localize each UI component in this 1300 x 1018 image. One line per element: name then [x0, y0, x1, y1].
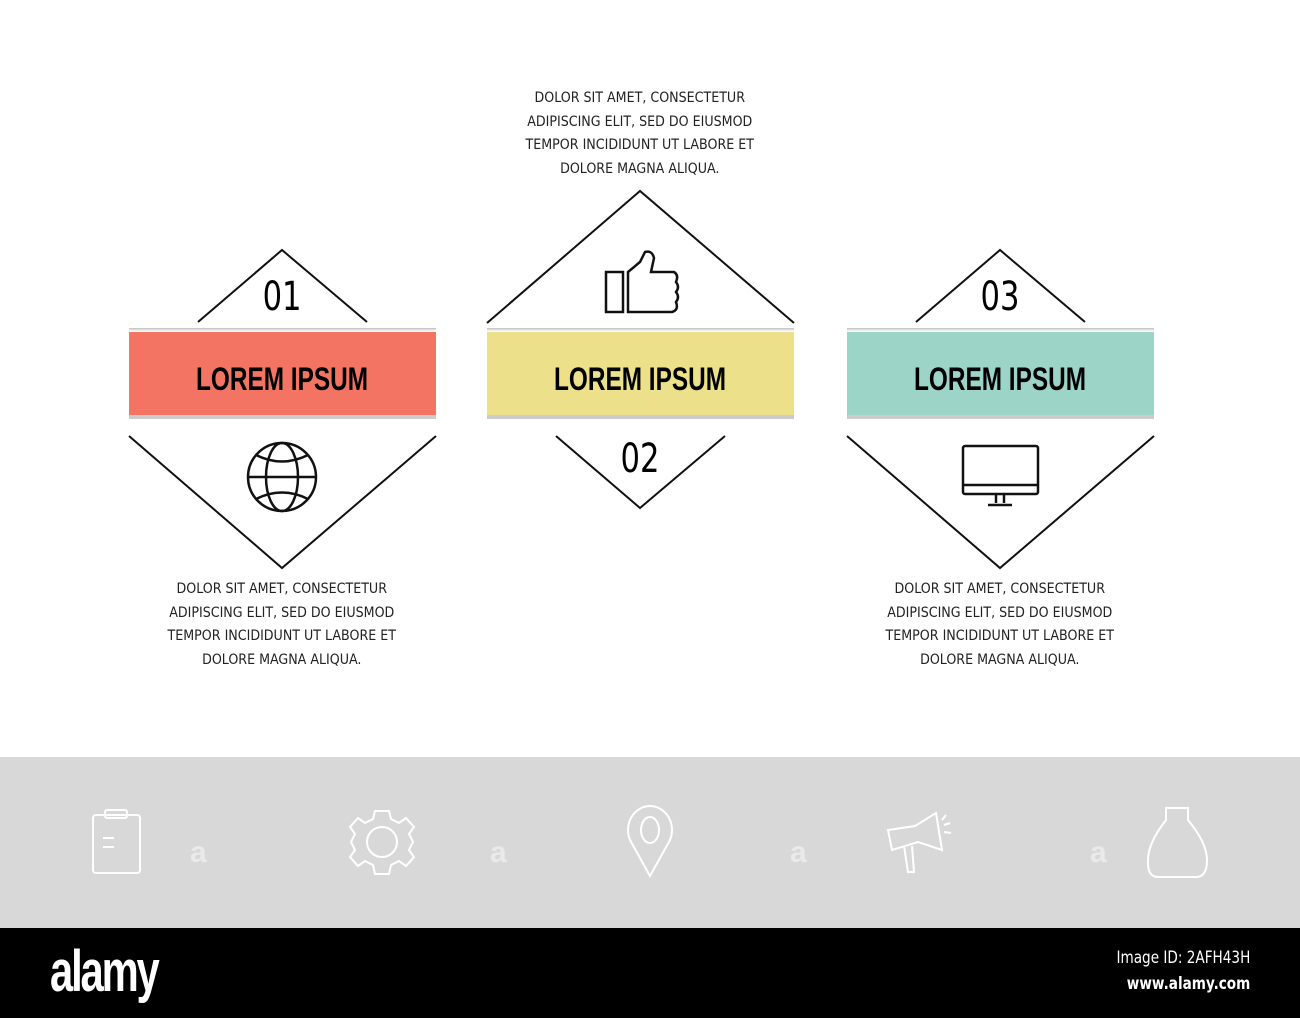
icon: gear: [350, 811, 414, 874]
text block 2: [525, 90, 754, 176]
bottom V 3: [847, 436, 1154, 568]
top triangle 1: [198, 250, 367, 322]
text block 2: DOLOR SIT AMET, CONSECTETUR: [535, 90, 745, 106]
icon: clipboard: [93, 810, 140, 873]
footer bar: [0, 928, 1300, 1018]
banner 2: [487, 328, 794, 419]
text block 1: DOLOR SIT AMET, CONSECTETUR: [177, 581, 387, 597]
icon strip: a: [790, 836, 807, 869]
image id: Image ID: 2AFH43H: [1116, 948, 1250, 968]
bottom V 1: [129, 436, 436, 568]
icon: monitor: [963, 446, 1038, 505]
banner 3: [847, 328, 1154, 419]
icon: map pin: [628, 806, 672, 876]
image id: www.alamy.com: [1126, 974, 1250, 994]
number 02: 02: [621, 435, 659, 482]
text block 3: DOLORE MAGNA ALIQUA.: [920, 652, 1080, 668]
top triangle 2: [487, 191, 794, 323]
text block 1: DOLORE MAGNA ALIQUA.: [202, 652, 362, 668]
text block 2: DOLORE MAGNA ALIQUA.: [560, 160, 720, 176]
icon: globe: [248, 443, 316, 511]
text block 3: DOLOR SIT AMET, CONSECTETUR: [895, 581, 1105, 597]
panel 3: [847, 250, 1154, 568]
icon strip: a: [190, 836, 207, 869]
icon strip: [0, 757, 1300, 928]
icon strip: a: [1090, 836, 1107, 869]
image id: [1116, 948, 1250, 994]
panel 2: [487, 191, 794, 508]
logo: alamy: [50, 939, 158, 1004]
panel 1: [129, 250, 436, 568]
top triangle 3: [916, 250, 1085, 322]
text block 1: [167, 581, 396, 668]
number 03: 03: [981, 273, 1019, 320]
text block 2: ADIPISCING ELIT, SED DO EIUSMOD: [527, 114, 753, 130]
icon: thumbs up: [606, 252, 678, 312]
text block 1: TEMPOR INCIDIDUNT UT LABORE ET: [168, 628, 396, 644]
text block 2: TEMPOR INCIDIDUNT UT LABORE ET: [526, 137, 754, 153]
bottom V 2: [556, 436, 725, 508]
banner 1: LOREM IPSUM: [196, 361, 368, 397]
text block 3: TEMPOR INCIDIDUNT UT LABORE ET: [886, 628, 1114, 644]
number 01: 01: [263, 273, 301, 320]
banner 2: LOREM IPSUM: [554, 361, 726, 397]
banner 3: LOREM IPSUM: [914, 361, 1086, 397]
text block 1: ADIPISCING ELIT, SED DO EIUSMOD: [169, 604, 395, 620]
banner 1: [129, 328, 436, 419]
text block 3: [885, 581, 1114, 668]
icon: bag: [1148, 808, 1207, 877]
icon strip: a: [490, 836, 507, 869]
icon: megaphone: [888, 813, 951, 872]
text block 3: ADIPISCING ELIT, SED DO EIUSMOD: [887, 604, 1113, 620]
main diagram: [128, 190, 1155, 570]
